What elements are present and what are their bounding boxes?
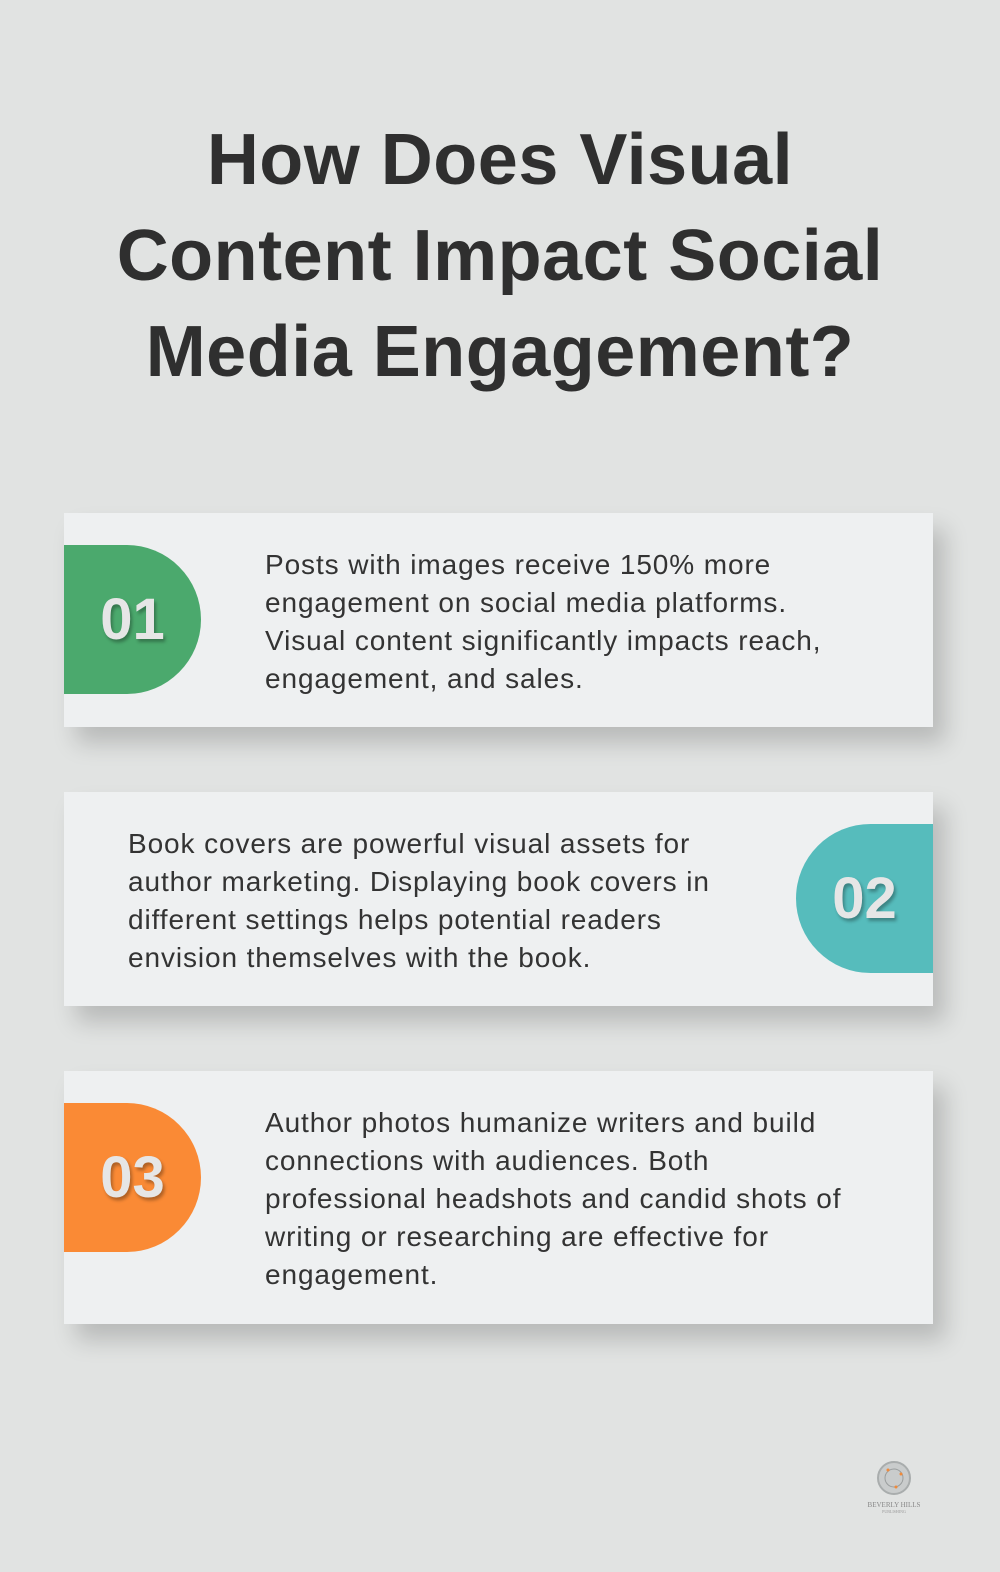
text: card 02: [128, 828, 710, 973]
badge: 02: [796, 824, 933, 973]
logo: PUBLISHING: [882, 1509, 906, 1514]
badge: 01: 01: [100, 587, 165, 652]
panel: card 02: [64, 792, 933, 1006]
badge: 01: [64, 545, 201, 694]
title: Content Impact Social: [117, 216, 883, 296]
text: card 01: engagement, and sales.: [265, 663, 584, 694]
title: [117, 120, 883, 392]
title: Media Engagement?: [146, 312, 854, 392]
panel: card 01: [64, 513, 933, 727]
badge: 03: 03: [100, 1145, 165, 1210]
logo: BEVERLY HILLS: [868, 1501, 920, 1509]
text: card 03: Author photos humanize writers and build: [265, 1107, 816, 1138]
text: card 01: engagement on social media platforms.: [265, 587, 787, 618]
text: card 03: writing or researching are effective for: [265, 1221, 769, 1252]
text: card 02: different settings helps potential readers: [128, 904, 662, 935]
panel: card 03: [64, 1071, 933, 1324]
text: card 02: Book covers are powerful visual assets for: [128, 828, 690, 859]
text: card 03: engagement.: [265, 1259, 438, 1290]
text: card 01: [265, 549, 821, 694]
text: card 01: Posts with images receive 150% more: [265, 549, 771, 580]
badge: 02: 02: [832, 866, 897, 931]
text: card 03: connections with audiences. Both: [265, 1145, 709, 1176]
title: How Does Visual: [207, 120, 793, 200]
text: card 01: Visual content significantly impacts reach,: [265, 625, 821, 656]
badge: 03: [64, 1103, 201, 1252]
text: card 02: envision themselves with the book.: [128, 942, 591, 973]
text: card 02: author marketing. Displaying book covers in: [128, 866, 710, 897]
logo: [868, 1461, 920, 1514]
text: card 03: professional headshots and candid shots of: [265, 1183, 841, 1214]
text: card 03: [265, 1107, 841, 1290]
